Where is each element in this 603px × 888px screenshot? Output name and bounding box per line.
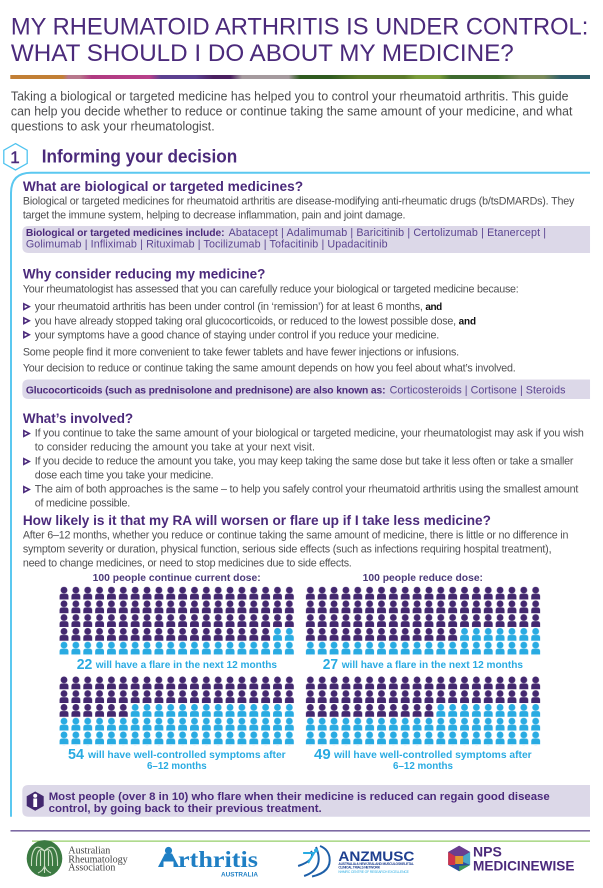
logo: Australian Rheumatology Association: Australian bbox=[68, 845, 111, 856]
heading: What are biological or targeted medicines? bbox=[23, 179, 303, 194]
text block: Your rheumatologist has assessed that you can carefully reduce your biological or targeted medicine because: bbox=[23, 284, 519, 296]
panel: how likely bbox=[23, 513, 568, 570]
panel: why consider reducing bbox=[22, 266, 590, 399]
caption: 6–12 months bbox=[393, 761, 453, 772]
logo: Arthritis Australia bbox=[158, 847, 258, 878]
text block bbox=[23, 530, 568, 570]
logo: ANZMUSC: CLINICAL TRIALS NETWORK bbox=[338, 865, 381, 870]
caption: will have well-controlled symptoms after bbox=[333, 750, 532, 761]
logo: Australian Rheumatology Association: Association bbox=[68, 863, 116, 874]
logo: NPS MedicineWise bbox=[448, 844, 574, 874]
caption bbox=[68, 747, 286, 772]
logo: ANZMUSC bbox=[298, 846, 414, 876]
intro paragraph: Taking a biological or targeted medicine has helped you to control your rheumatoid arthritis. This guide bbox=[11, 90, 569, 104]
title: WHAT SHOULD I DO ABOUT MY MEDICINE? bbox=[11, 40, 514, 67]
chart: continue current dose, flare bbox=[58, 573, 295, 673]
title: MY RHEUMATOID ARTHRITIS IS UNDER CONTROL: bbox=[11, 13, 588, 41]
text block: Some people find it more convenient to take fewer tablets and have fewer injections or infusions. bbox=[23, 346, 459, 358]
bullet list: you have already stopped taking oral glucocorticoids, or reduced to the lowest possible dose, bbox=[35, 315, 456, 327]
intro paragraph: questions to ask your rheumatologist. bbox=[11, 120, 215, 134]
caption bbox=[314, 747, 532, 772]
caption: 22 bbox=[77, 657, 92, 673]
logo: NPS MedicineWise: MEDICINEWISE bbox=[473, 858, 574, 874]
logo: ANZMUSC: NHMRC CENTRE OF RESEARCH EXCELLENCE bbox=[338, 870, 410, 874]
icon: information hexagon bbox=[27, 792, 44, 811]
title bbox=[11, 13, 588, 67]
icon: section number hexagon: 1 bbox=[10, 148, 20, 167]
bullet list: If you decide to reduce the amount you take, you may keep taking the same dose but take it less often or take a smaller bbox=[35, 456, 574, 468]
bullet list: and bbox=[459, 316, 476, 327]
caption: 6–12 months bbox=[147, 761, 207, 772]
bullet list: your symptoms have a good chance of staying under control if you reduce your medicine. bbox=[35, 329, 439, 341]
caption: will have a flare in the next 12 months bbox=[341, 660, 523, 671]
logo: NPS MedicineWise: NPS bbox=[473, 844, 502, 860]
callout: medicines list: Golimumab | Infliximab | Rituximab | Tocilizumab | Tofacitinib | Upadacitinib bbox=[26, 238, 388, 251]
panel: informing your decision frame bbox=[11, 173, 590, 817]
callout text: Most people (over 8 in 10) who flare when their medicine is reduced can regain good disease bbox=[49, 791, 550, 803]
caption bbox=[323, 657, 523, 673]
bullet list bbox=[24, 301, 476, 341]
text block bbox=[23, 195, 575, 222]
callout: medicines list bbox=[22, 226, 590, 253]
text block: target the immune system, helping to decrease inflammation, pain and joint damage. bbox=[23, 209, 405, 222]
heading: What’s involved? bbox=[23, 411, 133, 426]
caption: 27 bbox=[323, 657, 338, 673]
chart: reduce dose, flare bbox=[304, 573, 542, 673]
logo: Arthritis Australia: AUSTRALIA bbox=[221, 872, 258, 878]
pictogram: 27 of 100 bbox=[304, 587, 542, 655]
callout: glucocorticoids bbox=[22, 380, 590, 399]
logo: ANZMUSC: ANZMUSC bbox=[338, 848, 414, 864]
bullet list: dose each time you take your medicine. bbox=[35, 470, 214, 482]
heading: How likely is it that my RA will worsen or flare up if I take less medicine? bbox=[23, 513, 491, 528]
callout: medicines list: Abatacept | Adalimumab | Baricitinib | Certolizumab | Etanercept | bbox=[229, 227, 546, 239]
panel: what are biological medicines bbox=[22, 179, 590, 253]
text block: Your decision to reduce or continue taking the same amount depends on how you feel about what’s involved. bbox=[23, 363, 516, 375]
logo: Arthritis Australia: rthritis bbox=[178, 847, 258, 872]
bullet list: your rheumatoid arthritis has been under control (in ‘remission’) for at least 6 months, bbox=[35, 301, 423, 313]
section heading: Informing your decision bbox=[42, 147, 237, 167]
caption: will have a flare in the next 12 months bbox=[95, 660, 277, 671]
chart: continue current dose, well-controlled bbox=[58, 676, 295, 772]
text block: Biological or targeted medicines for rheumatoid arthritis are disease-modifying anti-rheumatic drugs (b/tsDMARDs). They bbox=[23, 195, 575, 208]
callout: regain disease control bbox=[22, 785, 590, 817]
logo: Australian Rheumatology Association bbox=[27, 840, 128, 877]
text block: need to change medicines, or need to stop medicines due to side effects. bbox=[23, 558, 352, 570]
callout text: control, by going back to their previous treatment. bbox=[49, 803, 322, 815]
logo: ANZMUSC: AUSTRALIA & NEW ZEALAND MUSCULOSKELETAL bbox=[338, 862, 414, 866]
caption: 49 bbox=[314, 747, 331, 763]
panel: what's involved bbox=[23, 411, 584, 510]
bullet list: If you continue to take the same amount of your biological or targeted medicine, your rheumatologist may ask if you wish bbox=[35, 428, 584, 440]
text block bbox=[23, 346, 516, 375]
caption bbox=[77, 657, 277, 673]
caption: will have well-controlled symptoms after bbox=[87, 750, 286, 761]
pictogram: 49 of 100 bbox=[304, 676, 542, 745]
callout text bbox=[49, 791, 550, 815]
bullet list: The aim of both approaches is the same – to help you safely control your rheumatoid arthritis using the smallest amount bbox=[35, 484, 578, 496]
bullet list: of medicine possible. bbox=[35, 498, 130, 510]
logo: Australian Rheumatology Association: Rheumatology bbox=[68, 854, 128, 865]
chart heading: 100 people continue current dose: bbox=[93, 573, 261, 584]
text block: After 6–12 months, whether you reduce or continue taking the same amount of medicine, there is little or no difference in bbox=[23, 530, 568, 542]
heading: Why consider reducing my medicine? bbox=[23, 266, 265, 282]
callout: glucocorticoids: Glucocorticoids (such as prednisolone and prednisone) are also known as: bbox=[26, 385, 386, 396]
pictogram: 54 of 100 bbox=[58, 676, 295, 745]
chart: reduce dose, well-controlled bbox=[304, 676, 542, 772]
caption: 54 bbox=[68, 747, 84, 763]
callout: medicines list: Biological or targeted medicines include: bbox=[26, 228, 225, 239]
icon: section number hexagon bbox=[4, 144, 27, 170]
bullet list bbox=[24, 428, 584, 510]
chart heading: 100 people reduce dose: bbox=[363, 573, 483, 584]
bullet list: to consider reducing the amount you take at your next visit. bbox=[35, 442, 315, 454]
pictogram: 22 of 100 bbox=[58, 587, 295, 655]
text block: symptom severity or duration, physical function, serious side effects (such as infections requiring hospital treatment), bbox=[23, 544, 552, 556]
intro paragraph: can help you decide whether to reduce or continue taking the same amount of your medicine, and what bbox=[11, 105, 573, 119]
bullet list: and bbox=[425, 302, 442, 313]
callout: glucocorticoids: Corticosteroids | Cortisone | Steroids bbox=[390, 384, 565, 396]
intro paragraph bbox=[11, 90, 573, 134]
